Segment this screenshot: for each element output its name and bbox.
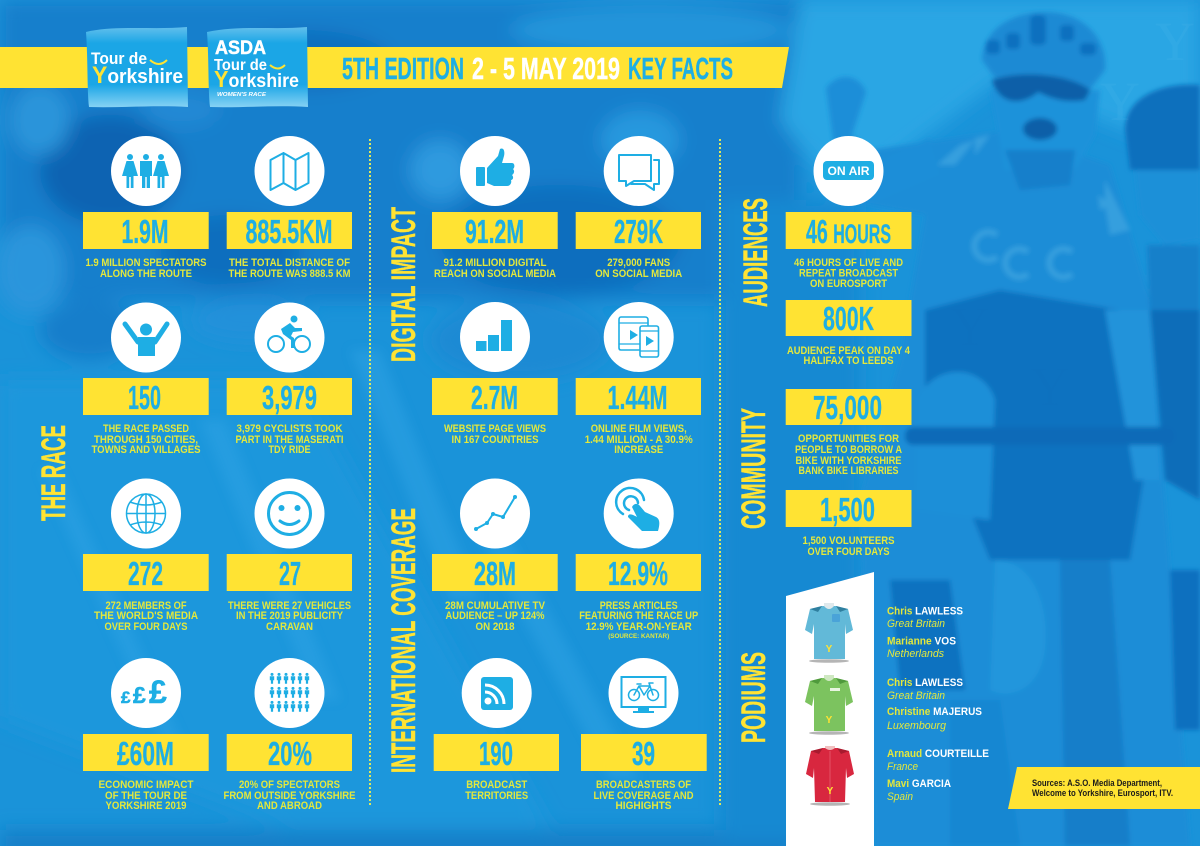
description: REACH ON SOCIAL MEDIA [434, 268, 556, 280]
icon: line graph [460, 478, 530, 548]
white jersey panel [786, 572, 874, 846]
description [794, 257, 903, 290]
title: 2 - 5 MAY 2019 [472, 51, 620, 86]
yellow banner [0, 47, 789, 88]
winners: red jersey: Arnaud COURTEILLE [887, 748, 989, 760]
description: AUDIENCE – UP 124% [446, 610, 545, 622]
icon: on air sign [814, 136, 884, 206]
value [576, 212, 701, 250]
winners: red jersey [887, 748, 989, 803]
background photo: crowd and road: Y [950, 296, 990, 357]
description [802, 535, 894, 558]
description: OVER FOUR DAYS [808, 546, 890, 558]
description: TOWNS AND VILLAGES [92, 444, 200, 456]
icon: tablet and phone [604, 302, 674, 372]
description [92, 423, 200, 456]
logo: ASDA Tour de Yorkshire women's race: WOMEN'S RACE [217, 92, 266, 98]
panel: the race [35, 136, 356, 812]
jersey: green: Y [826, 715, 833, 726]
stat: cyclists [227, 302, 352, 456]
value: 91.2M [465, 213, 524, 250]
value [83, 734, 209, 772]
winners: red jersey: Spain [887, 791, 913, 803]
icon: chat bubbles [604, 136, 674, 206]
winners: green jersey: Christine MAJERUS [887, 706, 982, 718]
icon: TV with bicycle [608, 658, 678, 728]
description: 279,000 FANS [607, 257, 670, 269]
stat: film views [576, 302, 701, 456]
description: IN 167 COUNTRIES [452, 434, 538, 446]
description [579, 600, 698, 640]
panel: podiums [735, 572, 989, 846]
icon: touch gesture [604, 478, 674, 548]
description: HIGHIGHTS [616, 800, 672, 812]
title: 5TH EDITION [342, 51, 464, 86]
value [83, 212, 209, 250]
stat: spectators [83, 136, 209, 280]
description [445, 600, 545, 633]
description: WEBSITE PAGE VIEWS [444, 423, 546, 435]
description: 91.2 MILLION DIGITAL [444, 257, 547, 269]
icon: crowd of people [254, 658, 324, 728]
icon: RSS feed [462, 658, 532, 728]
description: PART IN THE MASERATI [236, 434, 344, 446]
description [236, 423, 344, 456]
stat: fans [576, 136, 701, 280]
description: 3,979 CYCLISTS TOOK [236, 423, 343, 435]
winners: blue jersey [887, 606, 963, 660]
description: IN THE 2019 PUBLICITY [236, 610, 343, 622]
stat: economic impact [83, 658, 209, 812]
dotted divider [369, 139, 371, 806]
description: FEATURING THE RACE UP [579, 610, 698, 622]
description: ON 2018 [476, 621, 515, 633]
description: BROADCASTERS OF [596, 779, 691, 791]
winners: red jersey: Mavi GARCIA [887, 778, 951, 790]
icon: thumbs up [460, 136, 530, 206]
value: 1.44M [608, 379, 668, 416]
panel: digital impact [385, 136, 701, 456]
description [594, 779, 694, 812]
logo: ASDA Tour de Yorkshire women's race [207, 27, 308, 107]
description: BROADCAST [466, 779, 528, 791]
description [465, 779, 528, 802]
description: CARAVAN [266, 621, 313, 633]
description [98, 779, 194, 812]
description [585, 423, 693, 456]
value: 150 [128, 379, 161, 416]
value: 800K [823, 300, 874, 337]
value: 279K [614, 213, 663, 250]
logo: ASDA Tour de Yorkshire women's race: Tour de [214, 57, 267, 74]
description: ON EUROSPORT [810, 278, 887, 290]
value [434, 734, 559, 772]
value [432, 378, 558, 416]
value: 272 [128, 555, 163, 592]
description: THE ROUTE WAS 888.5 KM [228, 268, 351, 280]
stat: TV audience [432, 478, 558, 633]
stat: broadcast hours [786, 212, 912, 290]
heading: audiences: AUDIENCES [737, 198, 775, 307]
icon: smiley [254, 478, 324, 548]
description: THE WORLD'S MEDIA [94, 610, 198, 622]
value [83, 554, 209, 592]
icon: person with raised arms [111, 302, 181, 372]
value [581, 734, 707, 772]
description: OPPORTUNITIES FOR [798, 433, 899, 445]
description [595, 257, 683, 280]
icon: three people [111, 136, 181, 206]
logo: ASDA Tour de Yorkshire women's race: Yorkshire [214, 66, 299, 92]
value: 1.9M [122, 213, 168, 250]
heading: community: COMMUNITY [735, 408, 773, 529]
value [227, 734, 352, 772]
panel: community [735, 389, 912, 558]
icon: on air sign: ON AIR [828, 166, 870, 178]
value: 190 [479, 735, 513, 772]
description: THERE WERE 27 VEHICLES [228, 600, 351, 612]
description: ONLINE FILM VIEWS, [591, 423, 687, 435]
value: 12.9% [608, 555, 668, 592]
value: 3,979 [262, 379, 317, 416]
stat: bike libraries [786, 389, 912, 477]
icon: bar chart [460, 302, 530, 372]
description [224, 779, 356, 812]
description: (SOURCE: KANTAR) [608, 633, 669, 640]
description: 1.44 MILLION - A 30.9% [585, 434, 693, 446]
description [787, 345, 910, 367]
value: 28M [474, 555, 516, 592]
description: PEOPLE TO BORROW A [795, 444, 902, 456]
value: 885.5KM [246, 213, 332, 250]
heading: the race: THE RACE [35, 425, 73, 521]
description: ON SOCIAL MEDIA [595, 268, 683, 280]
description [228, 600, 351, 633]
header banner [0, 27, 789, 107]
logo: Tour de Yorkshire [86, 27, 188, 107]
description: REPEAT BROADCAST [799, 268, 898, 280]
cyclist [826, 12, 1200, 846]
jersey: blue [805, 603, 853, 663]
description: TDY RIDE [268, 444, 310, 456]
description: FROM OUTSIDE YORKSHIRE [224, 790, 356, 802]
description: YORKSHIRE 2019 [106, 800, 187, 812]
value [83, 378, 209, 416]
description [795, 433, 902, 477]
icon: pound signs: £ [149, 674, 167, 710]
value: 27 [279, 555, 301, 592]
description: OF THE TOUR DE [105, 790, 187, 802]
heading: digital impact: DIGITAL IMPACT [385, 207, 423, 362]
winners: blue jersey: Marianne VOS [887, 636, 956, 648]
logo: Tour de Yorkshire: Tour de [91, 49, 147, 68]
stat: broadcast territories [434, 658, 559, 802]
winners: green jersey: Luxembourg [887, 720, 947, 732]
stat: outside spectators [224, 658, 356, 812]
value: 1,500 [820, 491, 875, 528]
icon: cyclist [254, 302, 324, 372]
value [432, 554, 558, 592]
title: KEY FACTS [628, 51, 733, 86]
description: 20% OF SPECTATORS [239, 779, 340, 791]
description: THE RACE PASSED [103, 423, 189, 435]
description: 272 MEMBERS OF [106, 600, 187, 612]
stat: digital reach [432, 136, 558, 280]
value: 2.7M [471, 379, 518, 416]
description: BANK BIKE LIBRARIES [798, 465, 898, 477]
description: AUDIENCE PEAK ON DAY 4 [787, 345, 910, 357]
icon: pound signs [111, 658, 181, 728]
stat: media [83, 478, 209, 633]
heading: international coverage: INTERNATIONAL COVERAGE [385, 508, 423, 773]
jersey: red [806, 746, 854, 806]
stat: cities [83, 302, 209, 456]
description [94, 600, 198, 633]
description: TERRITORIES [465, 790, 528, 802]
value [227, 554, 352, 592]
value: 20% [268, 735, 312, 772]
description: OVER FOUR DAYS [104, 621, 188, 633]
panel: audiences [737, 136, 912, 367]
value: 46 HOURS [806, 213, 891, 250]
value: 75,000 [813, 389, 882, 426]
background photo: crowd and road: Y [1030, 356, 1070, 417]
winners: blue jersey: Chris LAWLESS [887, 606, 963, 618]
heading: podiums: PODIUMS [735, 652, 773, 743]
description: THROUGH 150 CITIES, [94, 434, 198, 446]
background photo: crowd and road: Y [1155, 11, 1195, 72]
stat: broadcasters [581, 658, 707, 812]
description: AND ABROAD [257, 800, 322, 812]
description [228, 257, 351, 280]
description: ALONG THE ROUTE [100, 268, 192, 280]
sources box [1008, 767, 1200, 809]
value [227, 378, 352, 416]
description: HALIFAX TO LEEDS [804, 355, 894, 367]
description [86, 257, 206, 280]
jersey: green [805, 675, 853, 735]
value: 39 [632, 735, 655, 772]
description: PRESS ARTICLES [600, 600, 678, 612]
winners: green jersey [887, 677, 982, 732]
jersey: red: Y [827, 786, 834, 797]
stat: audience peak [786, 300, 912, 367]
icon: pound signs: £ [121, 688, 131, 707]
description: 12.9% YEAR-ON-YEAR [586, 621, 692, 633]
icon: globe [111, 478, 181, 548]
description: INCREASE [614, 444, 663, 456]
description [444, 423, 546, 446]
icon: pound signs: £ [133, 682, 146, 708]
description: 1,500 VOLUNTEERS [802, 535, 894, 547]
description: 1.9 MILLION SPECTATORS [86, 257, 206, 269]
stat: vehicles [227, 478, 352, 633]
winners: blue jersey: Netherlands [887, 648, 944, 660]
description: THE TOTAL DISTANCE OF [229, 257, 350, 269]
winners: red jersey: France [887, 761, 918, 773]
description: 46 HOURS OF LIVE AND [794, 257, 903, 269]
sources box: Sources: A.S.O. Media Department, [1032, 778, 1162, 789]
value [227, 212, 352, 250]
winners: green jersey: Chris LAWLESS [887, 677, 963, 689]
icon: map [254, 136, 324, 206]
dotted divider [719, 139, 721, 806]
description: BIKE WITH YORKSHIRE [796, 455, 902, 467]
jersey: blue: Y [826, 644, 833, 655]
sources box: Welcome to Yorkshire, Eurosport, ITV. [1032, 788, 1173, 799]
stat: volunteers [786, 490, 912, 558]
description [434, 257, 556, 280]
logo: Tour de Yorkshire: Yorkshire [92, 62, 183, 89]
panel: international coverage [385, 478, 707, 812]
value: £60M [117, 735, 174, 772]
background photo: crowd and road: Y [1100, 71, 1140, 132]
winners: blue jersey: Great Britain [887, 618, 945, 630]
winners: green jersey: Great Britain [887, 690, 945, 702]
stat: distance [227, 136, 352, 280]
logo: ASDA Tour de Yorkshire women's race: ASDA [215, 38, 266, 59]
stat: page views [432, 302, 558, 446]
description: 28M CUMULATIVE TV [445, 600, 545, 612]
description: LIVE COVERAGE AND [594, 790, 694, 802]
description: ECONOMIC IMPACT [98, 779, 194, 791]
stat: press articles [576, 478, 701, 640]
